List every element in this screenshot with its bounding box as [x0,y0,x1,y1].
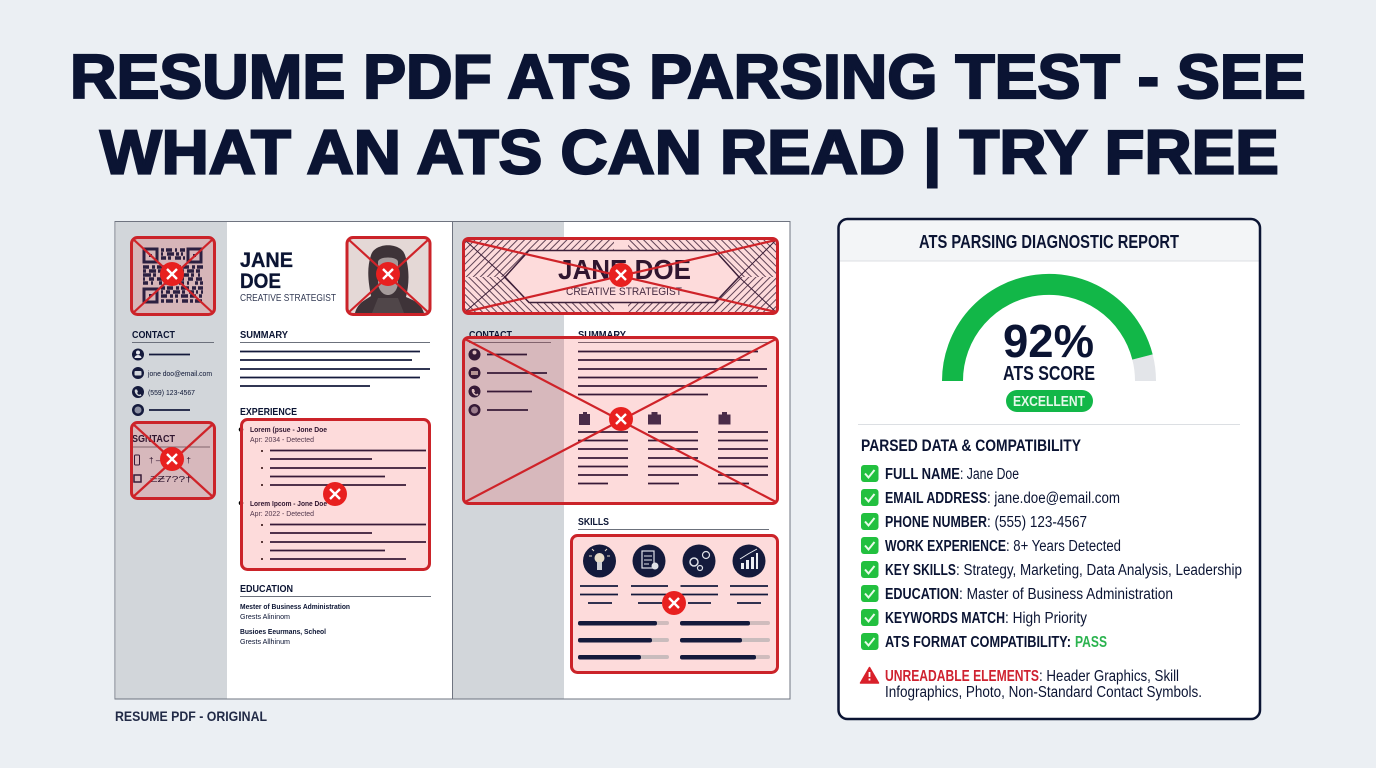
obscured contact and summary headings: SUMMARY [578,330,626,341]
parsed row: education: EDUCATION [885,586,959,603]
excellent badge [1006,390,1093,412]
name block [240,249,336,304]
parsed row: email: EMAIL ADDRESS [885,490,987,507]
report heading: ATS PARSING DIAGNOSTIC REPORT [919,231,1180,252]
summary section [240,330,430,386]
parsed row: full name: FULL NAME [885,466,960,483]
gauge: 92% [1003,315,1094,367]
name block: CREATIVE STRATEGIST [240,293,336,304]
panel: parsed resume page [464,238,778,672]
excellent badge: EXCELLENT [1013,393,1085,410]
icon: document [632,544,666,578]
parsed data heading: PARSED DATA & COMPATIBILITY [861,437,1081,455]
experience content [239,425,426,560]
icon: light bulb [583,544,616,578]
flagged skills infographic [572,536,778,672]
parsed row: education [861,585,1173,603]
education section: Busioes Eeurmans, Scheol [240,627,326,636]
summary section: SUMMARY [240,330,288,341]
panel: resume document comparison [115,222,790,699]
caption: RESUME PDF - ORIGINAL [115,708,267,724]
unreadable elements warning: UNREADABLE ELEMENTS [885,668,1039,685]
education section [240,584,431,646]
parsed row: education: : Master of Business Administration [959,586,1173,603]
experience content: Apr: 2022 - Detected [250,509,314,518]
parsed row: email: : jane.doe@email.com [987,490,1120,507]
parsed row: format compatibility: PASS [1075,634,1107,651]
title [70,43,1306,187]
panel: ATS diagnostic report [838,219,1260,719]
parsed row: work experience: WORK EXPERIENCE [885,538,1006,555]
parsed row: phone: : (555) 123-4567 [987,514,1087,531]
parsed row: key skills: : Strategy, Marketing, Data Analysis, Leadership [956,562,1242,579]
unreadable elements warning: : Header Graphics, Skill [1039,668,1179,685]
gauge: ATS SCORE [1003,363,1095,385]
red flag: secondary contact [132,422,214,498]
flagged main content [464,338,778,504]
parsed row: full name: : Jane Doe [960,466,1019,483]
red flag: experience [242,420,430,570]
parsed row: email [861,489,1120,507]
parsed row: key skills: KEY SKILLS [885,562,956,579]
contact section [132,330,214,416]
parsed row: phone: PHONE NUMBER [885,514,987,531]
flagged header graphic [464,238,778,314]
contact section: CONTACT [132,330,175,341]
unreadable elements warning: Infographics, Photo, Non-Standard Contact Symbols. [885,684,1202,701]
title: WHAT AN ATS CAN READ | TRY FREE [100,118,1279,187]
skills heading: SKILLS [578,517,609,528]
name block: JANE [240,249,293,272]
education section: Grests Allhinum [240,637,290,646]
contact section: jone doo@email.com [147,369,212,378]
icon: growth chart [732,544,766,578]
flagged secondary contact block: SGNTACT [132,434,175,445]
flagged photo [348,239,429,313]
red flag: QR code [132,238,214,314]
red flag: photo [347,238,430,314]
education section: EDUCATION [240,584,293,595]
gauge [952,284,1146,385]
title: RESUME PDF ATS PARSING TEST - SEE [70,43,1306,112]
flagged secondary contact block: ƵƵ7??† [150,475,192,484]
panel: original resume page [132,238,431,646]
parsed row: work experience [861,537,1121,555]
parsed row: phone [861,513,1087,531]
education section: Grests Alininom [240,612,290,621]
experience content: Lorem (psue - Jone Doe [250,425,327,434]
unreadable elements warning [860,668,1202,701]
parsed row: keywords match: KEYWORDS MATCH [885,610,1005,627]
parsed row: keywords match [861,609,1087,627]
experience content: Lorem Ipcom - Jone Doe [250,499,327,508]
flagged header graphic: JANE DOE [558,254,691,285]
parsed row: keywords match: : High Priority [1005,610,1087,627]
experience content: Apr: 2034 - Detected [250,435,314,444]
parsed row: format compatibility: ATS FORMAT COMPATIBILITY: [885,634,1071,651]
name block: DOE [240,270,281,293]
parsed row: full name [861,465,1019,483]
obscured contact and summary headings [469,331,626,336]
parsed row: key skills [861,561,1242,579]
contact section: (559) 123-4567 [148,388,195,397]
education section: Mester of Business Administration [240,602,350,611]
flagged secondary contact block: † – † · † · † [149,456,191,465]
skill bars [578,621,770,660]
flagged QR code [132,238,214,314]
flagged secondary contact block [132,434,210,484]
experience heading: EXPERIENCE [240,407,297,418]
parsed row: work experience: : 8+ Years Detected [1006,538,1121,555]
icon: gears [682,544,716,578]
flagged header graphic: CREATIVE STRATEGIST [566,286,682,298]
obscured contact and summary headings: CONTACT [469,330,512,341]
